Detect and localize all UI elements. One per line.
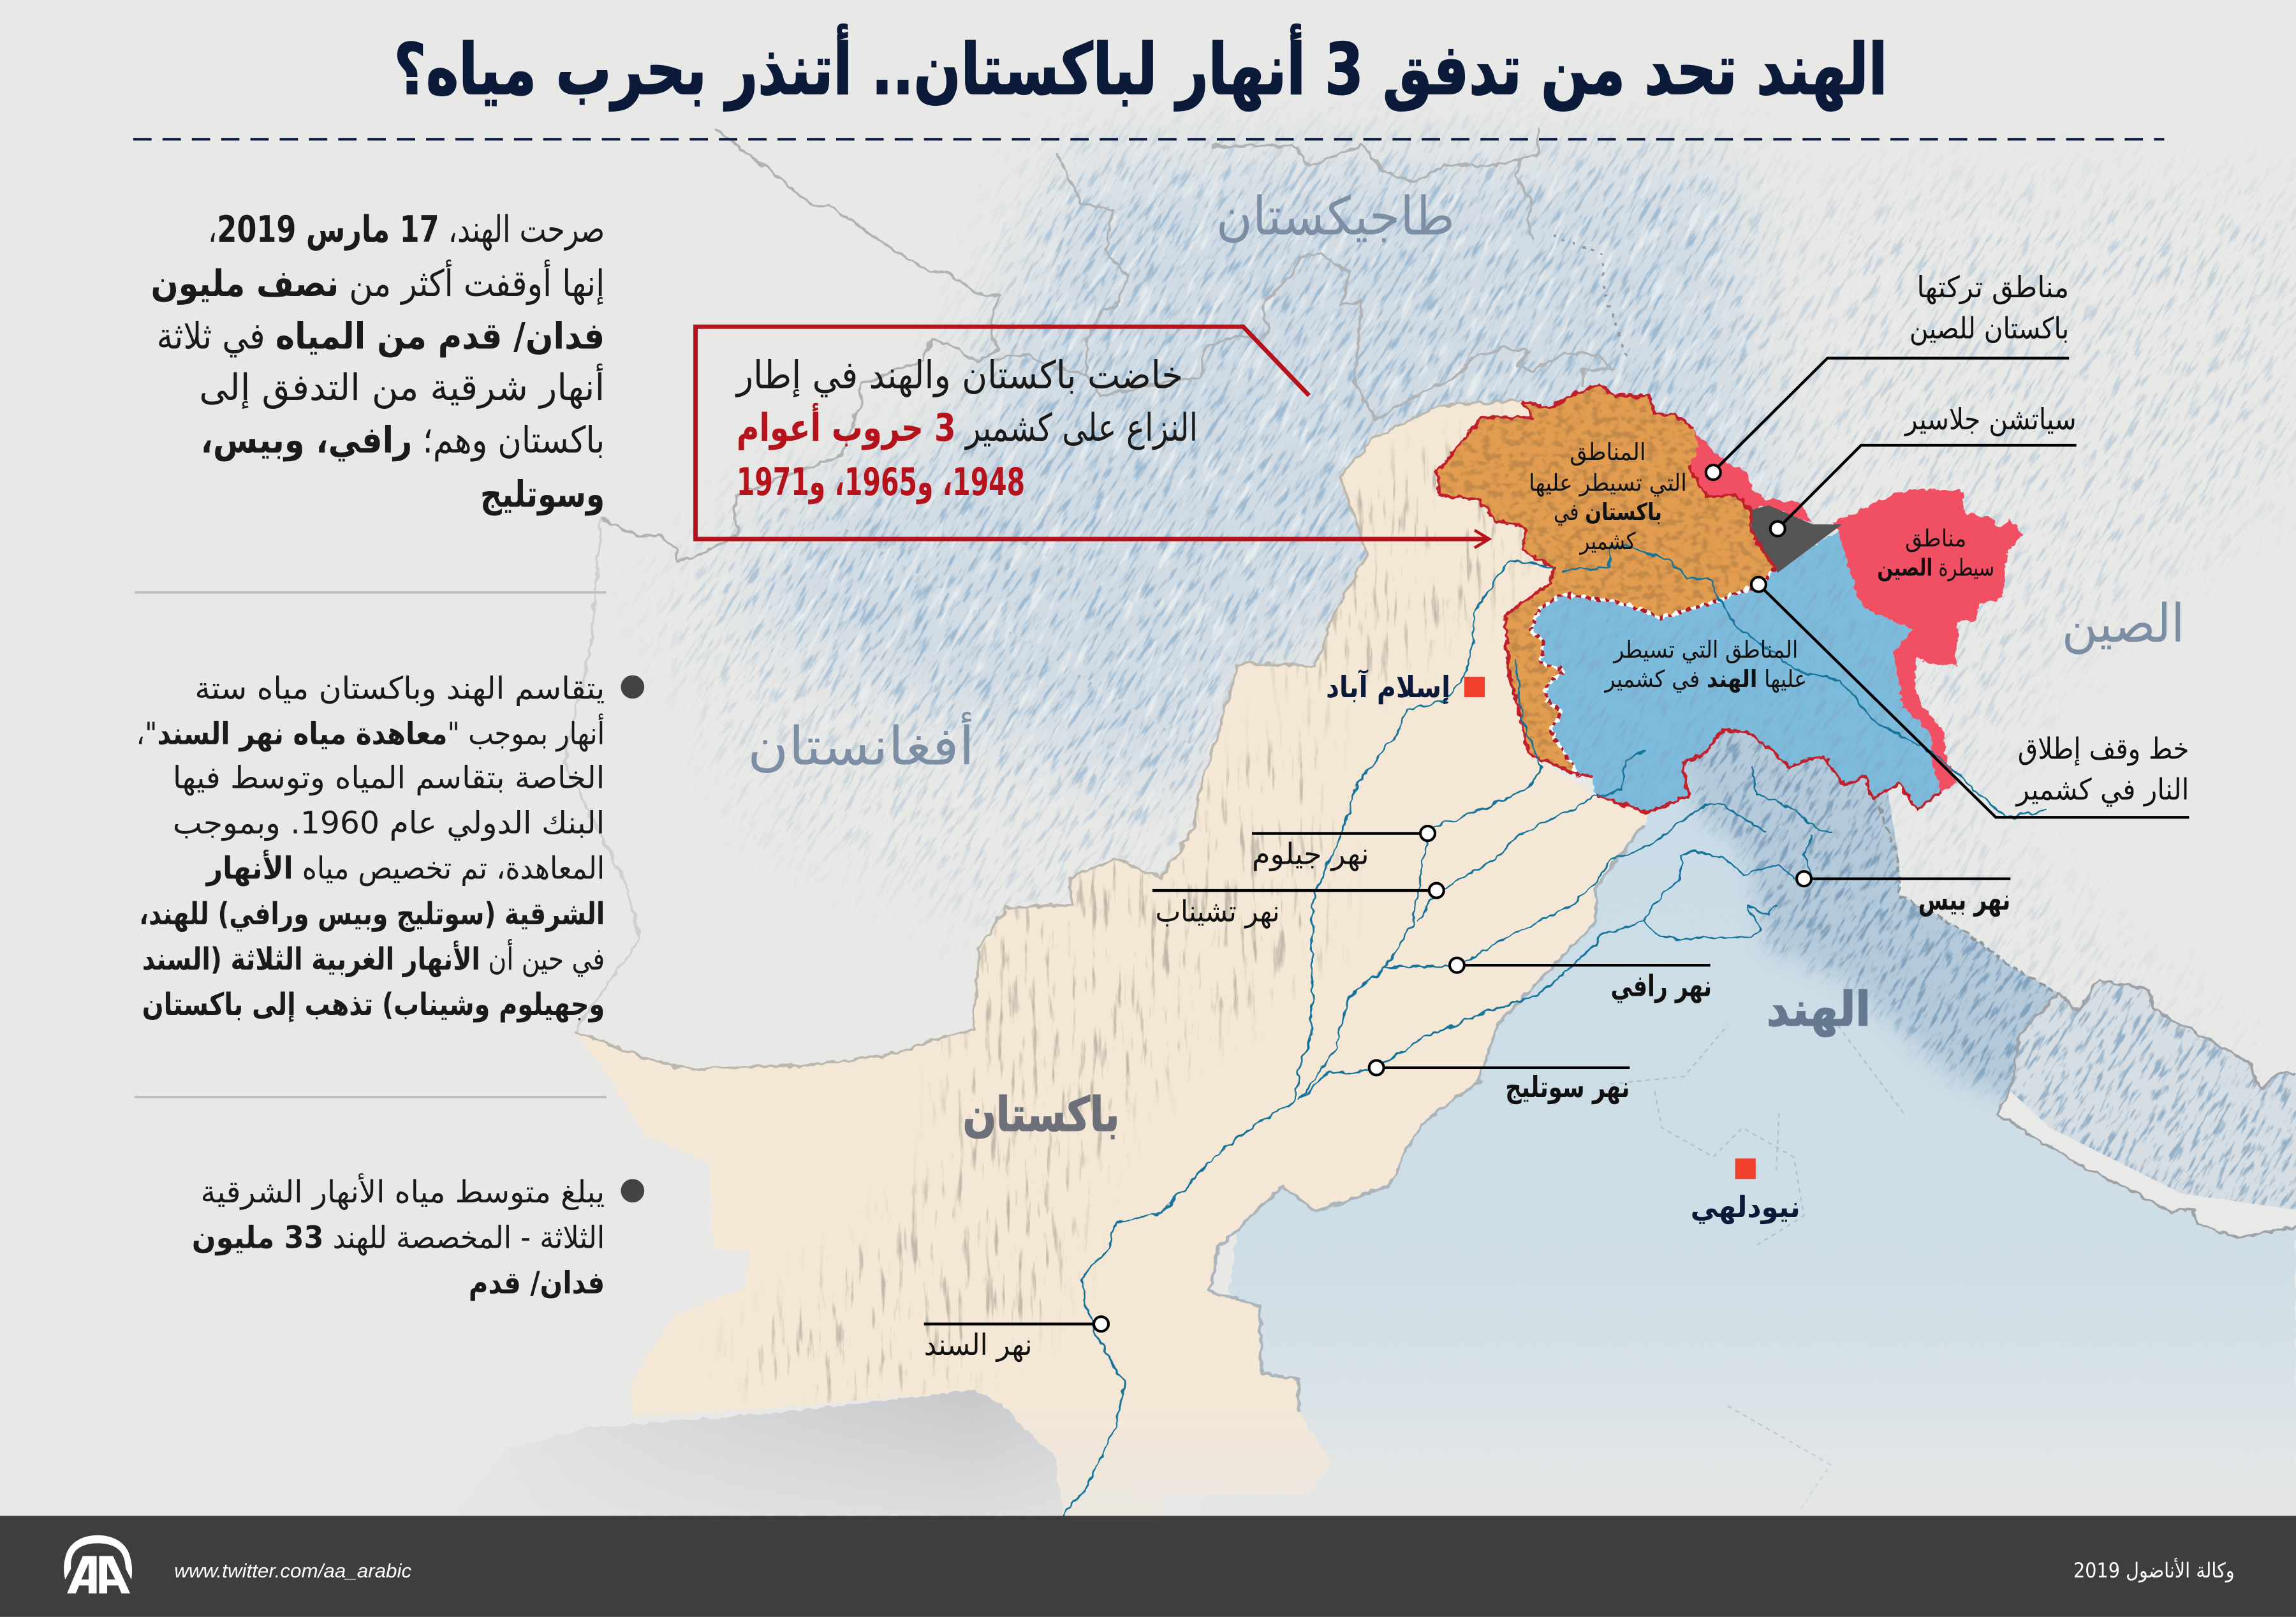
label: Pakistan-controlled: المناطق <box>1570 438 1646 466</box>
leader: Beas <box>1804 878 2010 880</box>
leader: Chenab <box>1152 890 1436 891</box>
footer link: www.twitter.com/aa_arabic <box>174 1560 412 1582</box>
region: Siachen glacier <box>1751 505 1842 573</box>
label: India: الهند <box>1767 982 1871 1037</box>
leader: Sutlej <box>1376 1067 1630 1068</box>
label: ceded to China: باكستان للصين <box>1910 311 2069 346</box>
label: Chenab: نهر تشيناب <box>1155 894 1280 929</box>
label: India-controlled: عليها الهند في كشمير <box>1603 665 1807 693</box>
region labels <box>1529 438 1994 693</box>
divider <box>135 592 607 593</box>
text block: average: الثلاثة - المخصصة للهند 33 مليون <box>192 1220 605 1255</box>
label: India-controlled: المناطق التي تسيطر <box>1612 636 1798 663</box>
label: Pakistan-controlled: كشمير <box>1579 528 1636 555</box>
label: line of control <box>2015 731 2189 808</box>
river: Indus <box>1063 563 1554 1516</box>
leader: Jhelum <box>1252 833 1428 834</box>
text block: intro: فدان/ قدم من المياه في ثلاثة <box>157 315 605 358</box>
Himalaya terrain <box>1611 688 2296 1509</box>
callout: three wars: النزاع على كشمير 3 حروب أعوام <box>737 403 1198 450</box>
footer bar <box>0 1516 2296 1617</box>
text block: treaty: الشرقية (سوتليج وبيس ورافي) للهند، <box>139 896 605 932</box>
text block: average: فدان/ قدم <box>469 1265 605 1301</box>
region: Pakistan-controlled Kashmir <box>1420 374 1786 783</box>
leader: ceded areas <box>1713 358 2069 471</box>
label: China-controlled: سيطرة الصين <box>1877 554 1994 581</box>
text block: treaty: أنهار بموجب "معاهدة مياه نهر السند"، <box>136 713 605 751</box>
text block: intro <box>151 208 605 517</box>
label: Pakistan-controlled: باكستان في <box>1554 498 1662 526</box>
label: Indus: نهر السند <box>924 1327 1033 1362</box>
label: Beas: نهر بيس <box>1918 882 2010 917</box>
top title: الهند تحد من تدفق 3 أنهار لباكستان.. أتنذر بحرب مياه؟ <box>394 24 1887 111</box>
text block: treaty: الخاصة بتقاسم المياه وتوسط فيها <box>173 760 605 795</box>
text block: treaty <box>136 670 644 1023</box>
divider <box>135 1096 607 1098</box>
river: Chenab <box>1417 750 1647 923</box>
label: China-controlled <box>1877 525 1994 581</box>
city: New Delhi <box>1691 1158 1800 1224</box>
text block: average <box>192 1172 644 1301</box>
text block: average: يبلغ متوسط مياه الأنهار الشرقية <box>201 1172 605 1210</box>
river: Ravi <box>1385 804 1765 968</box>
annotations <box>924 358 2189 1324</box>
callout: three wars <box>696 327 1489 548</box>
label: India-controlled <box>1603 636 1807 693</box>
dashed divider <box>133 138 2164 140</box>
label: line of control: النار في كشمير <box>2015 772 2189 808</box>
country: India base <box>1201 718 2296 1516</box>
callout: three wars: خاضت باكستان والهند في إطار <box>735 354 1183 398</box>
leader: line of control <box>1758 584 2189 817</box>
text block: treaty: وجهيلوم وشيناب) تذهب إلى باكستان <box>142 987 605 1023</box>
label: Pakistan: باكستان <box>963 1088 1119 1142</box>
text block: treaty: المعاهدة، تم تخصيص مياه الأنهار <box>205 850 605 887</box>
label: Pakistan-controlled <box>1529 438 1687 555</box>
leader: Siachen <box>1777 445 2077 529</box>
text block: intro: باكستان وهم؛ رافي، وبيس، <box>201 419 605 462</box>
river: upper Indus <box>1564 547 2049 817</box>
country labels <box>747 186 2185 1142</box>
river: Beas <box>1643 766 1833 921</box>
bullet <box>621 676 644 698</box>
text block: intro: أنهار شرقية من التدفق إلى <box>199 364 605 410</box>
label: Sutlej: نهر سوتليج <box>1505 1070 1630 1104</box>
label: Pakistan-controlled: التي تسيطر عليها <box>1529 469 1687 496</box>
text block: treaty: يتقاسم الهند وباكستان مياه ستة <box>195 670 605 706</box>
city: Islamabad: إسلام آباد <box>1326 669 1450 705</box>
city: New Delhi: نيودلهي <box>1691 1190 1800 1224</box>
river: Sutlej <box>1299 905 1776 1102</box>
footer credit: وكالة الأناضول 2019 <box>2073 1558 2235 1583</box>
region: India-controlled Kashmir <box>1533 530 1941 811</box>
region: China-controlled area <box>1833 489 2024 795</box>
text block: intro: إنها أوقفت أكثر من نصف مليون <box>151 260 605 306</box>
label: ceded to China <box>1910 270 2069 346</box>
marker dots <box>1094 465 1811 1331</box>
bottom fade <box>0 1391 2296 1516</box>
logo: AA <box>64 1535 132 1593</box>
leader: Indus <box>924 1324 1101 1325</box>
label: China-controlled: مناطق <box>1905 525 1966 552</box>
leader: Ravi <box>1457 964 1711 966</box>
callout: three wars: 1948، و1965، و1971 <box>737 461 1025 505</box>
text block: treaty: البنك الدولي عام 1960. وبموجب <box>173 806 605 841</box>
text block: intro: صرحت الهند، 17 مارس 2019، <box>208 208 605 251</box>
text block: treaty: في حين أن الأنهار الغربية الثلاثة (السند <box>142 939 605 977</box>
label: line of control: خط وقف إطلاق <box>2018 731 2189 766</box>
annotation labels <box>924 270 2189 1362</box>
label: Jhelum: نهر جيلوم <box>1252 837 1369 872</box>
sea gradient <box>454 1390 1066 1516</box>
label: Siachen: سياتشن جلاسير <box>1904 402 2077 437</box>
Kashmir boundary lines <box>1436 384 1941 813</box>
label: Ravi: نهر رافي <box>1611 968 1712 1003</box>
region: ceded to China <box>1688 429 1813 524</box>
label: Afghanistan: أفغانستان <box>747 712 975 778</box>
label: China: الصين <box>2062 593 2185 654</box>
country: Pakistan <box>574 398 1648 1516</box>
label: ceded to China: مناطق تركتها <box>1917 270 2069 305</box>
bullet <box>621 1179 644 1202</box>
text block: intro: وسوتليج <box>480 473 605 517</box>
river: Jhelum <box>1299 659 1540 1102</box>
map terrain base <box>563 106 2296 1045</box>
label: Tajikistan: طاجيكستان <box>1216 186 1455 247</box>
rivers <box>1063 547 2049 1516</box>
